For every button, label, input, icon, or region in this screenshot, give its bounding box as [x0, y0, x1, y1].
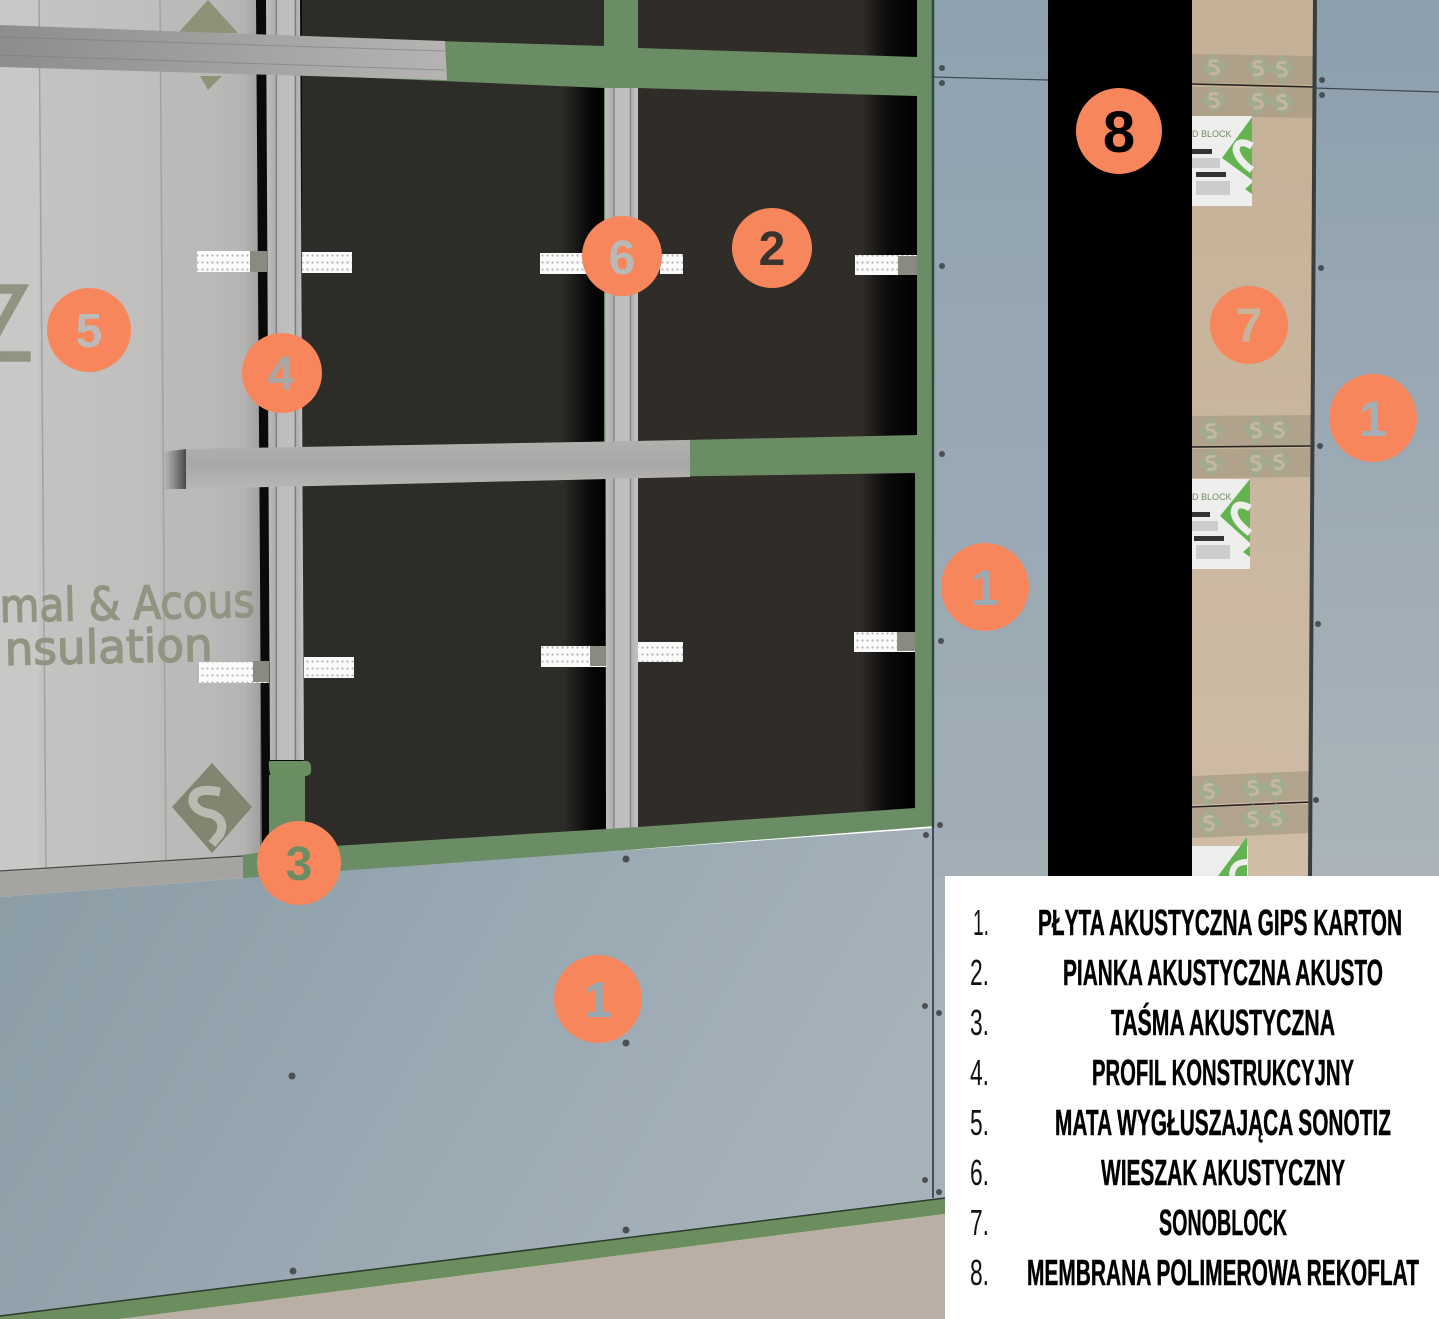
panel: floor: [0, 1198, 945, 1319]
callout 7: 7: [1236, 300, 1262, 353]
callout 8: 8: [1103, 100, 1135, 165]
mat logo text: mal & Acous: [0, 574, 255, 633]
sticker upper: [1192, 116, 1252, 206]
callout 3: 3: [286, 838, 312, 891]
icon: mat logo top: [178, 0, 238, 90]
icon: mat logo bottom: [172, 763, 252, 853]
legend row 3: 3.: [970, 1002, 989, 1043]
callout 4: 4: [268, 348, 295, 401]
tape logos: [1196, 52, 1295, 838]
legend row 7: [970, 1202, 1287, 1243]
mat logo text: [0, 285, 255, 676]
acoustic tape strip: [269, 775, 305, 855]
legend row 1: 1.: [973, 902, 989, 943]
callout 1 right: 1: [1359, 391, 1387, 447]
acoustic tape roll end: [269, 761, 311, 779]
tape bands: [1192, 54, 1314, 838]
callout 6: [582, 216, 662, 296]
callout 7: [1210, 286, 1288, 364]
sticker lower: D BLOCK: [1192, 492, 1232, 502]
sticker bottom: [1192, 837, 1248, 876]
panel: acoustic foam panels: [302, 0, 917, 848]
panel: acoustic mat background: [0, 0, 262, 875]
callout 1 middle: [941, 543, 1029, 631]
callout 2: [732, 208, 812, 288]
panel: right gypsum board column: [933, 0, 1048, 1198]
panel: bottom track: [0, 856, 243, 897]
legend row 4: [970, 1052, 1354, 1093]
legend row 3: [970, 1001, 1335, 1043]
legend row 6: [970, 1152, 1345, 1193]
legend row 7: 7.: [970, 1202, 989, 1243]
sticker lower: [1192, 479, 1250, 569]
callout 2: 2: [759, 223, 785, 276]
legend row 4: 4.: [970, 1052, 989, 1093]
legend row 8: 8.: [970, 1252, 989, 1293]
panel: vertical profile left: [266, 0, 311, 855]
legend row 6: 6.: [970, 1152, 989, 1193]
panel: middle horizontal profile: [163, 440, 690, 489]
callout 1 right: [1329, 374, 1417, 462]
legend row 2: [970, 952, 1383, 993]
panel: top horizontal profile: [0, 25, 447, 80]
callout 3: [257, 821, 341, 905]
legend row 5: 5.: [970, 1102, 989, 1143]
callout 6: 6: [609, 232, 635, 285]
legend row 7: SONOBLOCK: [1159, 1202, 1287, 1243]
callout 8: [1076, 88, 1162, 174]
panel: vertical profile middle: [605, 88, 638, 829]
sticker upper: D BLOCK: [1192, 129, 1232, 139]
panel: legend box: [945, 876, 1439, 1319]
panel: green acoustic tape frame: [243, 0, 935, 880]
callout 5: 5: [76, 305, 102, 358]
callout 5: [47, 288, 131, 372]
panel: screws: [288, 65, 1325, 1274]
legend row 2: 2.: [970, 952, 989, 993]
panel: front gypsum board bottom: [0, 828, 945, 1316]
callout 1 bottom: [554, 955, 642, 1043]
callout 1 bottom: 1: [584, 972, 612, 1028]
callout 1 middle: 1: [971, 560, 999, 616]
callout 4: [242, 333, 322, 413]
panel: black membrane: [1048, 0, 1192, 876]
panel: far right gypsum board: [1310, 0, 1439, 876]
panel: sonoblock board: [1192, 0, 1314, 876]
panel: dark cavity: [256, 0, 304, 855]
mat logo text: nsulation: [4, 618, 213, 676]
panel: acoustic hangers: [197, 251, 917, 683]
